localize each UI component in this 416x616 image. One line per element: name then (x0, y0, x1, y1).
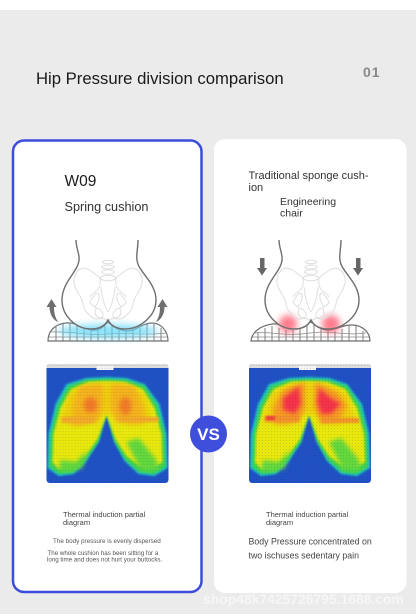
caption: thermal diagram: Thermal induction partial (266, 510, 348, 519)
icon: down arrow left (257, 258, 267, 276)
subheading: engineering chair: chair (280, 208, 303, 220)
subheading: spring cushion: Spring cushion (64, 200, 148, 214)
caption: thermal diagram: diagram (63, 518, 90, 527)
text: pressure dispersed: The body pressure is evenly dispersed (53, 538, 161, 545)
heat map: spring cushion (46, 364, 168, 483)
heading: traditional sponge cushion: Traditional sponge cush- (248, 170, 369, 182)
text: pressure concentrated: two ischuses sedentary pain (248, 550, 359, 560)
section number: 01 (363, 64, 381, 80)
heat map: sponge cushion (249, 364, 371, 483)
panel: traditional sponge cushion (214, 139, 406, 593)
caption: thermal diagram: diagram (266, 518, 293, 527)
heading: W09: W09 (64, 173, 96, 190)
subheading: engineering chair: Engineering (280, 196, 336, 208)
watermark: shop48k7425726795.1688.com (203, 591, 404, 607)
illustration: hips on sponge cushion (251, 240, 370, 341)
panel: W09 spring cushion (13, 140, 202, 592)
caption: thermal diagram: Thermal induction partial (63, 510, 145, 519)
icon: up arrow left (46, 299, 58, 322)
text: pressure concentrated: Body Pressure concentrated on (248, 536, 372, 546)
text: whole cushion note: The whole cushion has been sitting for a (48, 550, 159, 557)
title: Hip Pressure division comparison (36, 69, 284, 88)
icon: up arrow right (156, 299, 168, 322)
text: whole cushion note: long time and does not hurt your buttocks. (47, 556, 163, 564)
illustration: hips on spring cushion (46, 240, 168, 341)
icon: down arrow right (353, 258, 363, 276)
VS badge (190, 416, 227, 452)
VS badge: VS (197, 425, 220, 444)
heading: traditional sponge cushion: ion (248, 182, 263, 194)
